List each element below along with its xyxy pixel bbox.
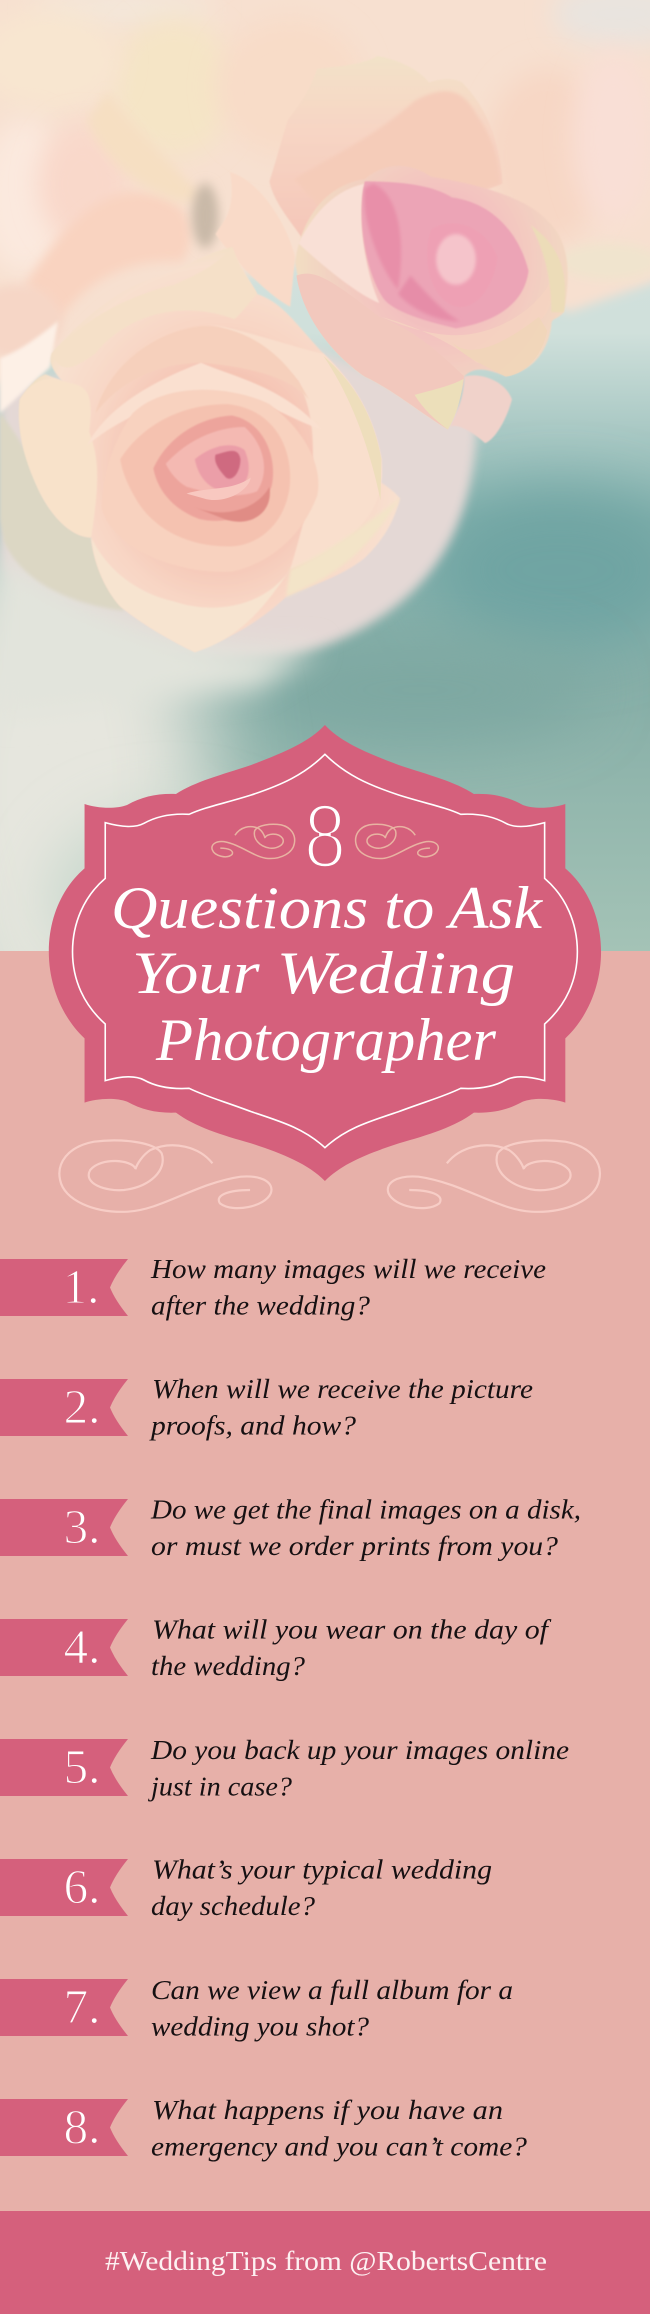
photo: pink roses in a white vase	[0, 0, 650, 951]
question 3	[0, 1494, 581, 1561]
question 2: When will we receive the picture	[152, 1374, 533, 1404]
title text: Your Wedding	[132, 940, 515, 1006]
question 2: proofs, and how?	[149, 1411, 357, 1441]
question 4: What will you wear on the day of	[152, 1614, 552, 1644]
question 3: or must we order prints from you?	[151, 1531, 559, 1561]
question 7: Can we view a full album for a	[151, 1975, 513, 2005]
question 7: 7.	[64, 1979, 100, 2034]
footer band: #WeddingTips from @RobertsCentre	[105, 2246, 547, 2276]
question 5: 5.	[64, 1739, 100, 1794]
question 8	[0, 2095, 528, 2162]
question 6: What’s your typical wedding	[152, 1854, 492, 1884]
question 7	[0, 1975, 513, 2042]
question 2	[0, 1374, 533, 1441]
question 8: What happens if you have an	[152, 2095, 503, 2125]
question 1: after the wedding?	[151, 1291, 371, 1321]
small flourish left	[212, 824, 295, 859]
question 5	[0, 1735, 569, 1802]
title text: Photographer	[155, 1007, 497, 1073]
large flourish right	[388, 1140, 600, 1212]
vase	[0, 340, 477, 660]
question 1: How many images will we receive	[150, 1254, 546, 1284]
question 1	[0, 1254, 546, 1321]
question 5: just in case?	[148, 1772, 293, 1802]
large flourish left	[59, 1140, 271, 1212]
question 6: day schedule?	[151, 1891, 316, 1921]
title badge	[49, 725, 601, 1181]
question 4: 4.	[64, 1619, 100, 1674]
question 3: Do we get the final images on a disk,	[150, 1494, 581, 1524]
soft leaf	[0, 413, 124, 611]
rose two	[216, 56, 568, 443]
title text: Questions to Ask	[111, 875, 543, 941]
title number 8: 8	[304, 787, 346, 887]
blurred back roses	[0, 0, 650, 395]
rose one	[19, 247, 400, 652]
title text	[111, 875, 543, 1073]
question 4	[0, 1614, 552, 1681]
badge inner white outline	[73, 754, 577, 1148]
question 5: Do you back up your images online	[150, 1735, 569, 1765]
question 6	[0, 1854, 492, 1921]
question 6: 6.	[64, 1859, 100, 1914]
question 4: the wedding?	[151, 1651, 306, 1681]
footer band	[0, 2211, 650, 2314]
question 2: 2.	[64, 1379, 100, 1434]
small flourish right	[356, 824, 438, 859]
question 3: 3.	[64, 1499, 100, 1554]
question 8: emergency and you can’t come?	[151, 2132, 528, 2162]
badge outer shape	[49, 725, 601, 1181]
question 1: 1.	[63, 1259, 99, 1314]
question 8: 8.	[64, 2099, 100, 2154]
question 7: wedding you shot?	[151, 2012, 370, 2042]
